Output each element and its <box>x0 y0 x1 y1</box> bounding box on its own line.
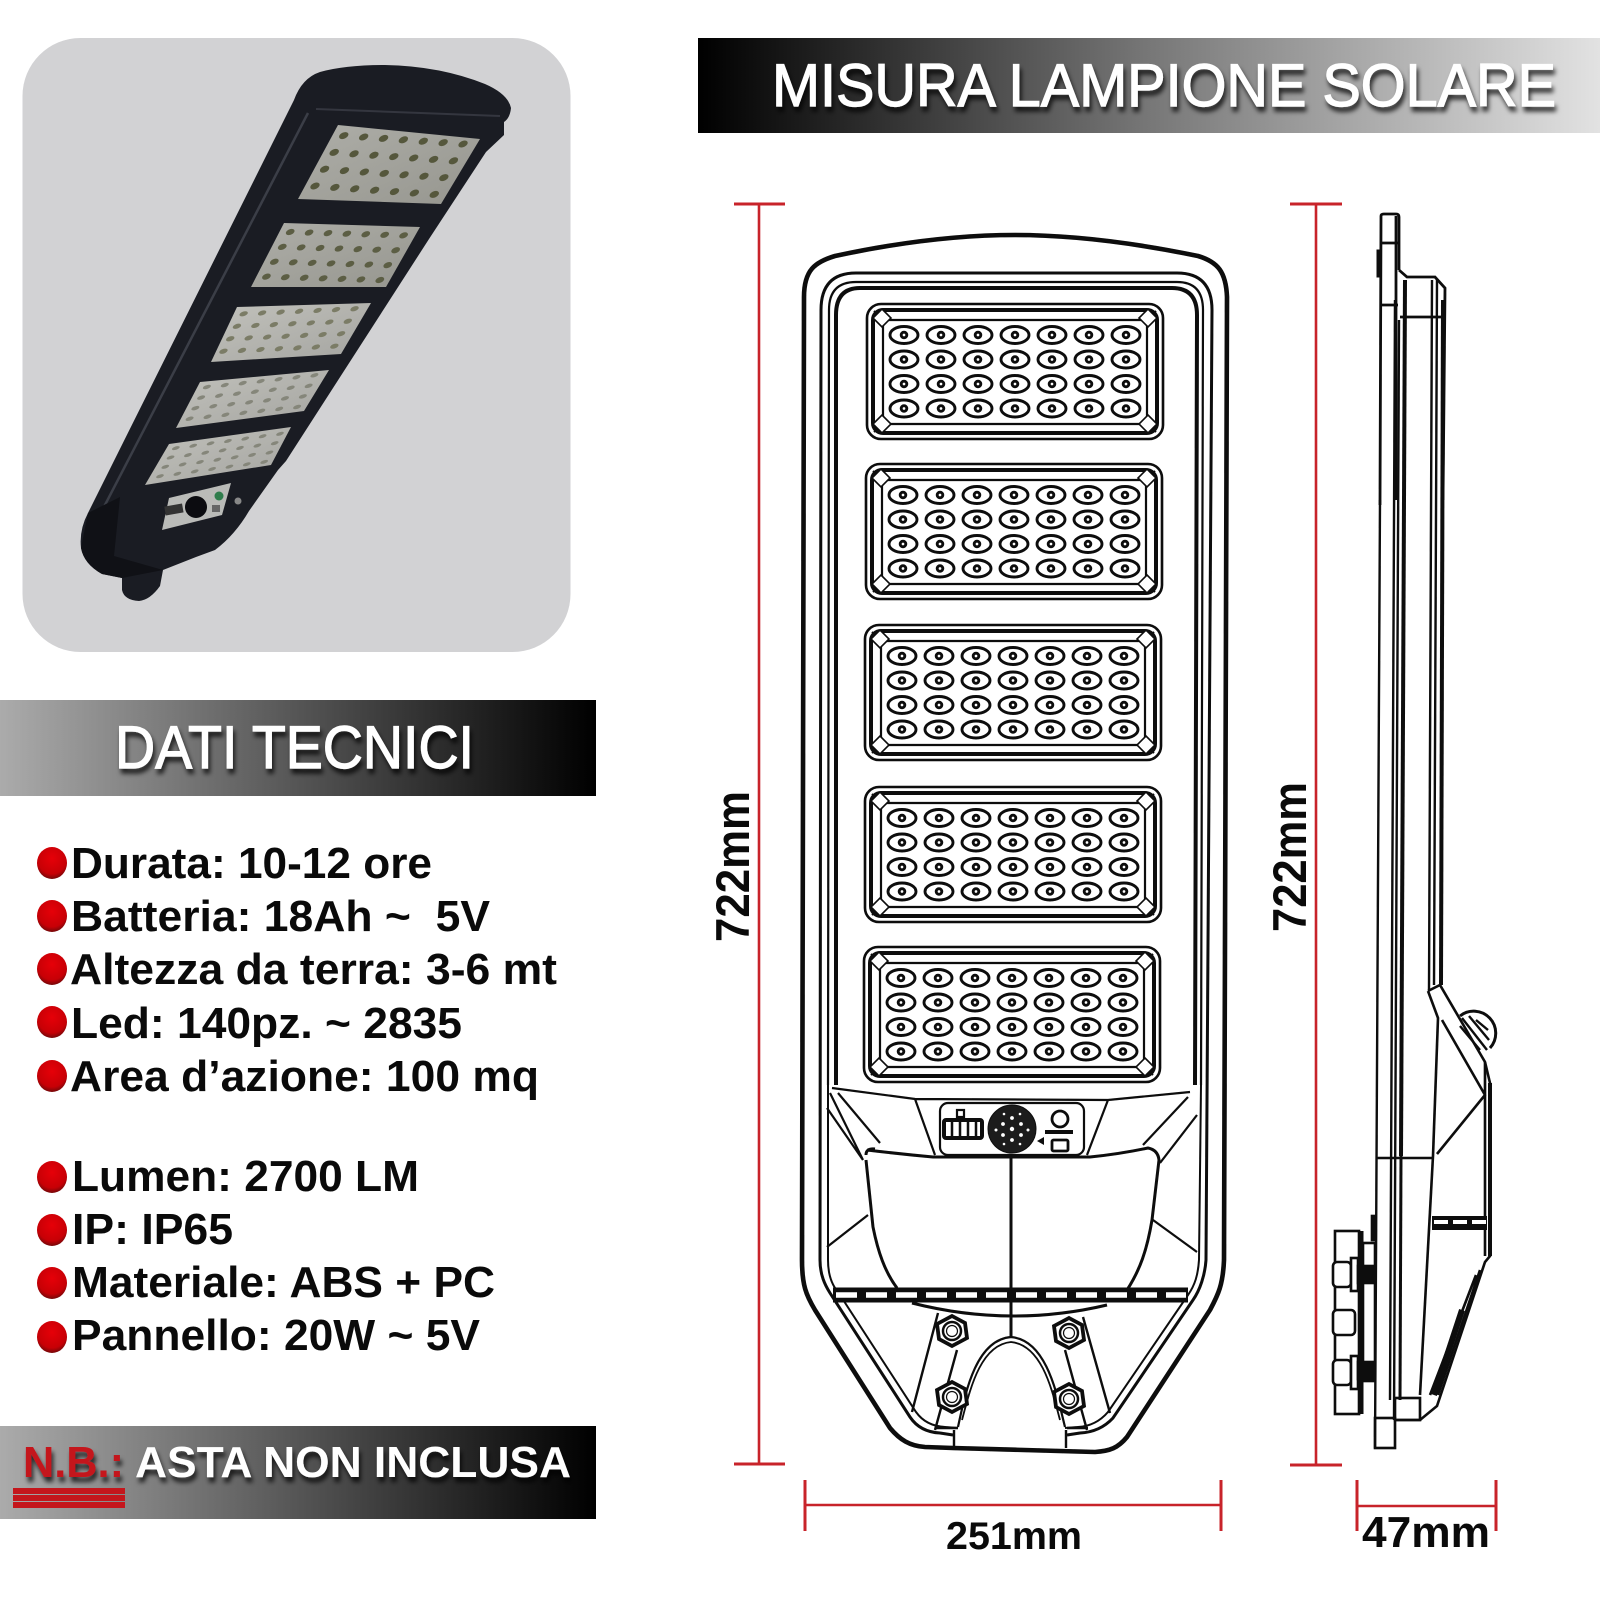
LED module 3 <box>865 625 1161 760</box>
central battery cover <box>866 1148 1159 1337</box>
sensor plate <box>940 1103 1084 1155</box>
line drawing: front view of lamp <box>802 235 1227 1452</box>
spec: lumen: Lumen: 2700 LM <box>72 1152 419 1201</box>
dimension label: 251mm: 251mm <box>946 1515 1082 1558</box>
mounting bracket <box>912 1313 1110 1448</box>
LED panel 3 <box>211 303 371 362</box>
dimension label: 722mm front: 722mm <box>706 791 759 942</box>
spec: pannello: Pannello: 20W ~ 5V <box>72 1311 481 1360</box>
bolt 4 <box>1054 1384 1084 1414</box>
LED module 1 <box>867 304 1163 439</box>
heading banner: misura lampione solare <box>698 38 1600 133</box>
panel: product photo <box>22 38 570 652</box>
spec: materiale: Materiale: ABS + PC <box>72 1258 495 1307</box>
icon: lamp body <box>81 65 511 601</box>
spec: altezza: Altezza da terra: 3-6 mt <box>70 945 557 994</box>
spec: durata: Durata: 10-12 ore <box>71 839 432 888</box>
line drawing: side view of lamp <box>1333 214 1496 1448</box>
LED panel 1 <box>298 125 480 204</box>
spec: area: Area d’azione: 100 mq <box>70 1052 539 1101</box>
spec: batteria: Batteria: 18Ah ~ 5V <box>71 892 491 941</box>
sensor module <box>162 483 242 530</box>
LED panel 2 <box>251 223 420 287</box>
dashed vent band <box>833 1288 1188 1302</box>
lower housing lines <box>827 1088 1197 1252</box>
LED module 2 <box>866 464 1162 599</box>
side vent band <box>1432 1222 1487 1223</box>
dimension label: 722mm side: 722mm <box>1263 782 1316 932</box>
dimension: height front <box>734 204 785 1464</box>
LED module 5 <box>864 947 1160 1082</box>
LED panel 4 <box>176 370 329 428</box>
dimension: height side <box>1290 204 1342 1465</box>
lamp inner frame <box>820 273 1212 1435</box>
heading banner: dati tecnici: DATI TECNICI <box>115 714 474 781</box>
callout banner: asta non inclusa: ASTA NON INCLUSA <box>135 1438 571 1487</box>
bolt 3 <box>1054 1318 1084 1348</box>
sensor head <box>1377 985 1496 1420</box>
spec: led: Led: 140pz. ~ 2835 <box>71 999 462 1048</box>
callout banner: asta non inclusa: N.B.: <box>23 1438 124 1487</box>
dimension: depth side <box>1357 1480 1496 1531</box>
spec list group 1 <box>37 839 557 1101</box>
spec list group 2 <box>37 1152 495 1360</box>
dimension: width front <box>805 1480 1221 1531</box>
lamp outer outline <box>802 235 1227 1452</box>
dimension label: 47mm: 47mm <box>1362 1508 1490 1557</box>
side bottom tab <box>1375 1398 1420 1448</box>
bolt 1 <box>937 1316 967 1346</box>
side profile main lines <box>1375 214 1445 1448</box>
callout banner: asta non inclusa <box>0 1426 596 1519</box>
pole mounting clamp <box>1333 1216 1375 1414</box>
spec: ip: IP: IP65 <box>72 1205 233 1254</box>
heading banner: misura lampione solare: MISURA LAMPIONE SOLARE <box>772 52 1556 119</box>
LED panel 5 <box>145 427 291 485</box>
LED module 4 <box>865 787 1161 922</box>
heading banner: dati tecnici <box>0 700 596 796</box>
bolt 2 <box>937 1382 967 1412</box>
